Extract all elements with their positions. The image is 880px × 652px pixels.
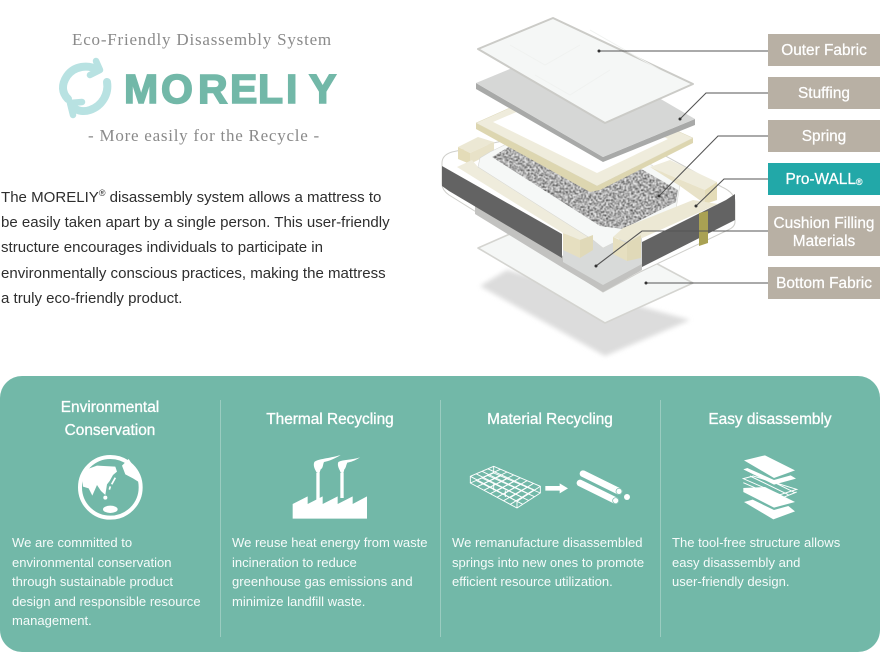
- heading: Eco-Friendly Disassembly System: Eco-Friendly Disassembly System: [72, 30, 332, 49]
- spring border: [478, 118, 680, 248]
- side panel left: [442, 166, 562, 258]
- label: Pro-WALL: Pro-WALL: [785, 171, 856, 188]
- panel: benefits: [0, 376, 880, 652]
- back-right cushion rail: [650, 160, 717, 204]
- body text: environmental conservation: [12, 554, 172, 570]
- label: Cushion Filling Materials: Cushion Filling: [774, 215, 874, 232]
- body text: We reuse heat energy from waste: [232, 535, 428, 550]
- panel: Environmental Conservation: [12, 399, 201, 628]
- heading: Material Recycling: [487, 411, 613, 428]
- icon: factory: [292, 455, 367, 519]
- label: Outer Fabric: Outer Fabric: [781, 42, 867, 59]
- body text: The tool-free structure allows: [672, 535, 840, 550]
- base underside: [475, 202, 642, 292]
- label: Spring: Spring: [802, 128, 846, 145]
- outer fabric layer: [478, 18, 693, 123]
- body text: [12, 535, 201, 628]
- icon: globe: [78, 455, 143, 520]
- cushion rail left: [457, 160, 593, 240]
- body text: easy disassembly and: [672, 554, 800, 570]
- corner block front right: [613, 235, 641, 261]
- body text: minimize landfill waste.: [232, 594, 365, 608]
- label: Cushion Filling Materials: [768, 206, 880, 256]
- heading: [61, 399, 159, 438]
- label: Stuffing: [768, 77, 880, 109]
- body text: management.: [12, 613, 92, 628]
- body text: [232, 535, 428, 608]
- spring unit: [492, 128, 678, 229]
- heading: Conservation: [65, 422, 155, 438]
- body text: through sustainable product: [12, 574, 173, 589]
- recycled rods: [580, 474, 630, 504]
- label: Bottom Fabric: Bottom Fabric: [776, 275, 872, 292]
- label: Outer Fabric: [768, 34, 880, 66]
- back-left cushion block: [458, 137, 494, 164]
- spring tray: [470, 467, 540, 508]
- body text: user-friendly design.: [672, 574, 789, 589]
- body text: design and responsible resource: [12, 594, 201, 608]
- text block: introduction: be easily taken apart by a single person. This user-friendly: [1, 214, 390, 231]
- mattress base edge: [442, 120, 735, 292]
- body text: greenhouse gas emissions and: [232, 574, 413, 589]
- text block: introduction: [1, 188, 390, 307]
- side panel right: [642, 194, 735, 267]
- tag: Pro-WALL: [699, 211, 708, 246]
- cushion filling center: [563, 215, 642, 285]
- panel: Material Recycling: [452, 411, 644, 589]
- body text: [452, 535, 644, 589]
- body text: efficient resource utilization.: [452, 574, 613, 589]
- body text: We are committed to: [12, 535, 132, 550]
- leader dots: [594, 50, 698, 284]
- label: Bottom Fabric: [768, 267, 880, 299]
- icon: springs to rods: [470, 466, 630, 508]
- body text: springs into new ones to promote: [452, 554, 644, 570]
- panel: Easy disassembly: [672, 411, 840, 589]
- bottom fabric layer: [478, 212, 693, 323]
- wordmark: MORELIY: [124, 66, 336, 112]
- leader lines: [596, 51, 768, 283]
- label: Spring: [768, 120, 880, 152]
- corner block front left: [563, 233, 593, 258]
- heading: Easy disassembly: [708, 411, 832, 428]
- exploded mattress diagram: [442, 17, 768, 357]
- icon: recycle arrows: [63, 61, 107, 115]
- body text: [672, 535, 840, 589]
- removable frame: [476, 82, 693, 192]
- arrow: [545, 484, 568, 494]
- label: Stuffing: Stuffing: [798, 85, 850, 102]
- tagline: - More easily for the Recycle -: [88, 126, 320, 145]
- stuffing layer: [476, 45, 695, 162]
- heading: Thermal Recycling: [266, 411, 394, 428]
- floor shadow: [480, 270, 690, 356]
- label: Pro-WALL: [768, 163, 880, 195]
- text block: introduction: The MORELIY® disassembly system allows a mattress to: [1, 188, 381, 206]
- heading: Environmental: [61, 399, 159, 416]
- text block: introduction: environmentally conscious practices, making the mattress: [1, 265, 386, 282]
- text block: introduction: structure encourages individuals to participate in: [1, 239, 323, 256]
- body text: incineration to reduce: [232, 554, 357, 570]
- label: Cushion Filling Materials: Materials: [793, 233, 855, 250]
- text block: introduction: a truly eco-friendly product.: [1, 290, 182, 307]
- icon: stacked layers: [742, 455, 798, 520]
- label: Pro-WALL: ®: [856, 176, 863, 186]
- panel: Thermal Recycling: [232, 411, 428, 608]
- cushion rail right: [613, 200, 718, 243]
- logo: MORELIY: [59, 58, 337, 118]
- body text: We remanufacture disassembled: [452, 535, 642, 550]
